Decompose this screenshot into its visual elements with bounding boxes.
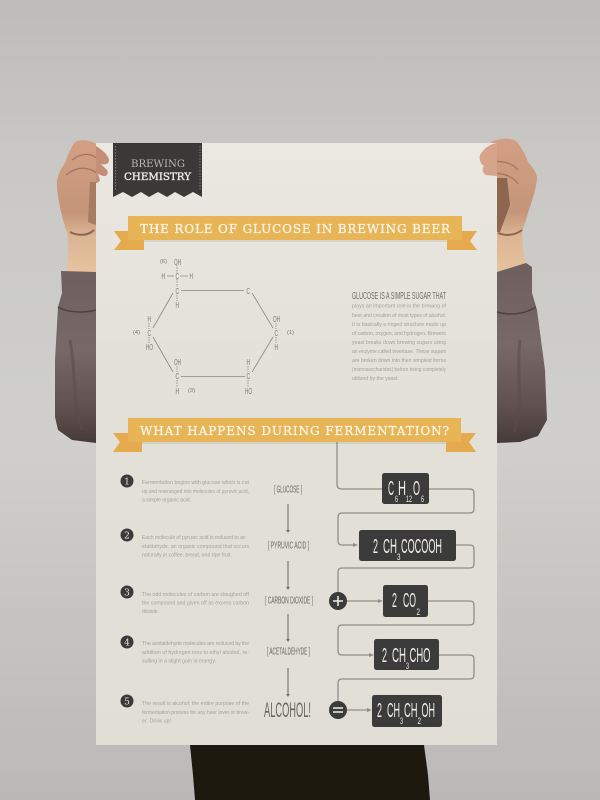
step 4: addition of hydrogen ions to ethyl alcohol, re-	[142, 650, 249, 656]
step 5: The result is alcohol; the entire purpose of the	[142, 701, 249, 707]
glucose description text block: are broken down into their simplest forms	[352, 358, 446, 364]
glucose ring molecule diagram: (1)	[287, 330, 294, 336]
step 3: 3	[124, 588, 130, 598]
plus operator	[329, 592, 347, 610]
glucose description text block: (monosaccharides) before being completely	[352, 367, 446, 373]
step 4: The acetaldehyde molecules are reduced by the	[142, 641, 249, 647]
step 1: up and rearranged into molecules of pyruvic acid,	[142, 489, 249, 495]
left sleeve	[55, 271, 96, 443]
step 1	[120, 474, 250, 504]
step 1: Fermentation begins with glucose which is cut	[142, 480, 250, 486]
glucose description text block: It is basically a ringed structure made up	[352, 322, 446, 328]
glucose ring molecule diagram: H	[176, 301, 179, 310]
text: [ CARBON DIOXIDE ]	[265, 596, 313, 606]
glucose ring molecule diagram: C	[274, 329, 278, 338]
step 5: 5	[124, 698, 130, 708]
formula box: 2 CH3CH2OH: OH	[422, 700, 435, 722]
ribbon heading: role of glucose	[114, 216, 477, 250]
formula box: 2 CH3CH2OH: 3	[400, 716, 403, 726]
glucose ring molecule diagram: H	[246, 358, 250, 367]
step 5: fermentation process for any beer lover or brew-	[142, 710, 249, 716]
glucose description text block: of carbon, oxygen, and hydrogen. Brewers	[352, 331, 446, 337]
formula box: C6H12O6: C	[388, 478, 394, 500]
right arm and hand	[480, 139, 537, 272]
step 2: 2	[124, 532, 130, 542]
step 1: a simple organic acid.	[142, 498, 191, 504]
formula box: 2 CO2: 2	[416, 607, 420, 617]
glucose ring molecule diagram: HO	[146, 343, 153, 352]
glucose description text block: beer and creation of most types of alcohol.	[352, 313, 446, 319]
step 2: etaldehyde, an organic compound that occurs	[142, 544, 249, 550]
glucose ring molecule diagram: (6)	[160, 259, 167, 265]
title tag: brewing chemistry: BREWING	[131, 159, 185, 170]
glucose ring molecule diagram: H	[148, 315, 151, 324]
step 4: 4	[124, 638, 130, 648]
formula box: C6H12O6: 12	[406, 494, 412, 504]
glucose description text block: an enzyme called invertase. These sugars	[352, 349, 446, 355]
right sleeve	[497, 263, 547, 443]
glucose ring molecule diagram: C	[176, 372, 179, 381]
glucose description text block	[352, 290, 447, 382]
formula box: 2 CH3CHO: CHO	[410, 645, 430, 667]
formula box: 2 CH3CHO: 3	[406, 661, 409, 671]
glucose ring molecule diagram	[133, 258, 294, 396]
formula box: C6H12O6	[382, 473, 429, 504]
ribbon heading: what happens during fermentation: WHAT HAPPENS DURING FERMENTATION?	[140, 424, 449, 438]
formula box: 2 CH3COCOOH: CH	[383, 536, 397, 558]
glucose ring molecule diagram: H	[274, 343, 278, 352]
formula box: 2 CH3CHO: 2	[382, 645, 387, 667]
step 2: naturally in coffee, bread, and ripe fruit.	[142, 552, 232, 558]
step 5: er. Drink up!	[142, 718, 171, 724]
glucose ring molecule diagram: OH	[174, 258, 181, 267]
glucose ring molecule diagram: C	[148, 329, 151, 338]
compound labels and down arrows: [ ACETALDEHYDE ]	[267, 646, 310, 658]
formula box: 2 CH3CH2OH	[372, 695, 442, 727]
formula box: 2 CH3COCOOH: 3	[397, 552, 400, 562]
formula box: 2 CH3COCOOH: COCOOH	[401, 536, 442, 558]
left arm and hand	[57, 140, 109, 272]
glucose ring molecule diagram: H	[176, 387, 179, 396]
glucose ring molecule diagram: OH	[174, 358, 181, 367]
formula box: 2 CO2: CO	[403, 590, 416, 612]
trousers of the person holding the poster	[190, 745, 430, 800]
step 4: sulting in a slight gain in energy.	[142, 658, 216, 664]
title tag: brewing chemistry	[113, 143, 202, 197]
formula box: 2 CH3CH2OH: 2	[377, 700, 382, 722]
formula box: C6H12O6: O	[413, 478, 420, 500]
glucose ring molecule diagram: (4)	[133, 330, 140, 336]
equals operator	[329, 701, 347, 719]
glucose description text block: yeast breaks down brewing sugars using	[352, 340, 446, 346]
formula box: 2 CH3CH2OH: 2	[418, 716, 421, 726]
title tag: brewing chemistry: CHEMISTRY	[124, 172, 191, 183]
glucose ring molecule diagram: H	[190, 272, 193, 281]
step 3	[120, 586, 250, 615]
fingers over the poster, right	[480, 143, 497, 176]
glucose ring molecule diagram: (3)	[188, 388, 195, 394]
ribbon heading: role of glucose: THE ROLE OF GLUCOSE IN BREWING BEER	[140, 222, 451, 236]
formula box: 2 CH3CH2OH: CH	[404, 700, 418, 722]
glucose description text block: GLUCOSE IS A SIMPLE SUGAR THAT	[352, 290, 446, 302]
compound labels and down arrows: [ GLUCOSE ]	[274, 484, 302, 496]
step 2	[120, 528, 249, 558]
glucose ring molecule diagram: OH	[273, 315, 280, 324]
step 4	[120, 636, 249, 664]
formula box: C6H12O6: 6	[421, 494, 424, 504]
fingers over the poster, left	[96, 146, 109, 183]
glucose ring molecule diagram: C	[246, 287, 250, 296]
compound labels and down arrows	[264, 484, 313, 722]
compound labels and down arrows: [ PYRUVIC ACID ]	[268, 540, 309, 552]
glucose description text block: plays an important role in the brewing of	[352, 304, 447, 310]
glucose ring molecule diagram: H	[162, 272, 165, 281]
formula box: 2 CH3CH2OH: CH	[387, 700, 400, 722]
poster sheet	[96, 143, 497, 745]
step 2: Each molecule of pyruvic acid is reduced to ac-	[142, 535, 247, 541]
step 1: 1	[124, 478, 130, 488]
formula box: 2 CH3CHO	[374, 639, 439, 671]
text: ALCOHOL!	[264, 699, 311, 722]
ribbon heading: what happens during fermentation	[113, 418, 476, 452]
glucose ring molecule diagram: C	[176, 287, 179, 296]
glucose ring molecule diagram: C	[176, 272, 179, 281]
formula box: 2 CH3CHO: CH	[392, 645, 406, 667]
formula box: 2 CO2: 2	[392, 590, 397, 612]
glucose description text block: utilized by the yeast.	[352, 376, 399, 382]
formula box: 2 CO2	[383, 585, 428, 617]
step 3: The odd molecules of carbon are sloughed off	[142, 592, 250, 598]
formula box: 2 CH3COCOOH: 2	[373, 536, 378, 558]
formula box: 2 CH3COCOOH	[359, 530, 456, 562]
formula box: C6H12O6: 6	[395, 494, 398, 504]
step 3: dioxide.	[142, 609, 159, 615]
step 3: the compound and given off as excess carbon	[142, 600, 249, 606]
glucose ring molecule diagram: C	[246, 372, 250, 381]
flow connector lines	[337, 442, 474, 712]
formula box: C6H12O6: H	[398, 478, 406, 500]
step 5	[120, 694, 249, 724]
glucose ring molecule diagram: HO	[245, 387, 252, 396]
